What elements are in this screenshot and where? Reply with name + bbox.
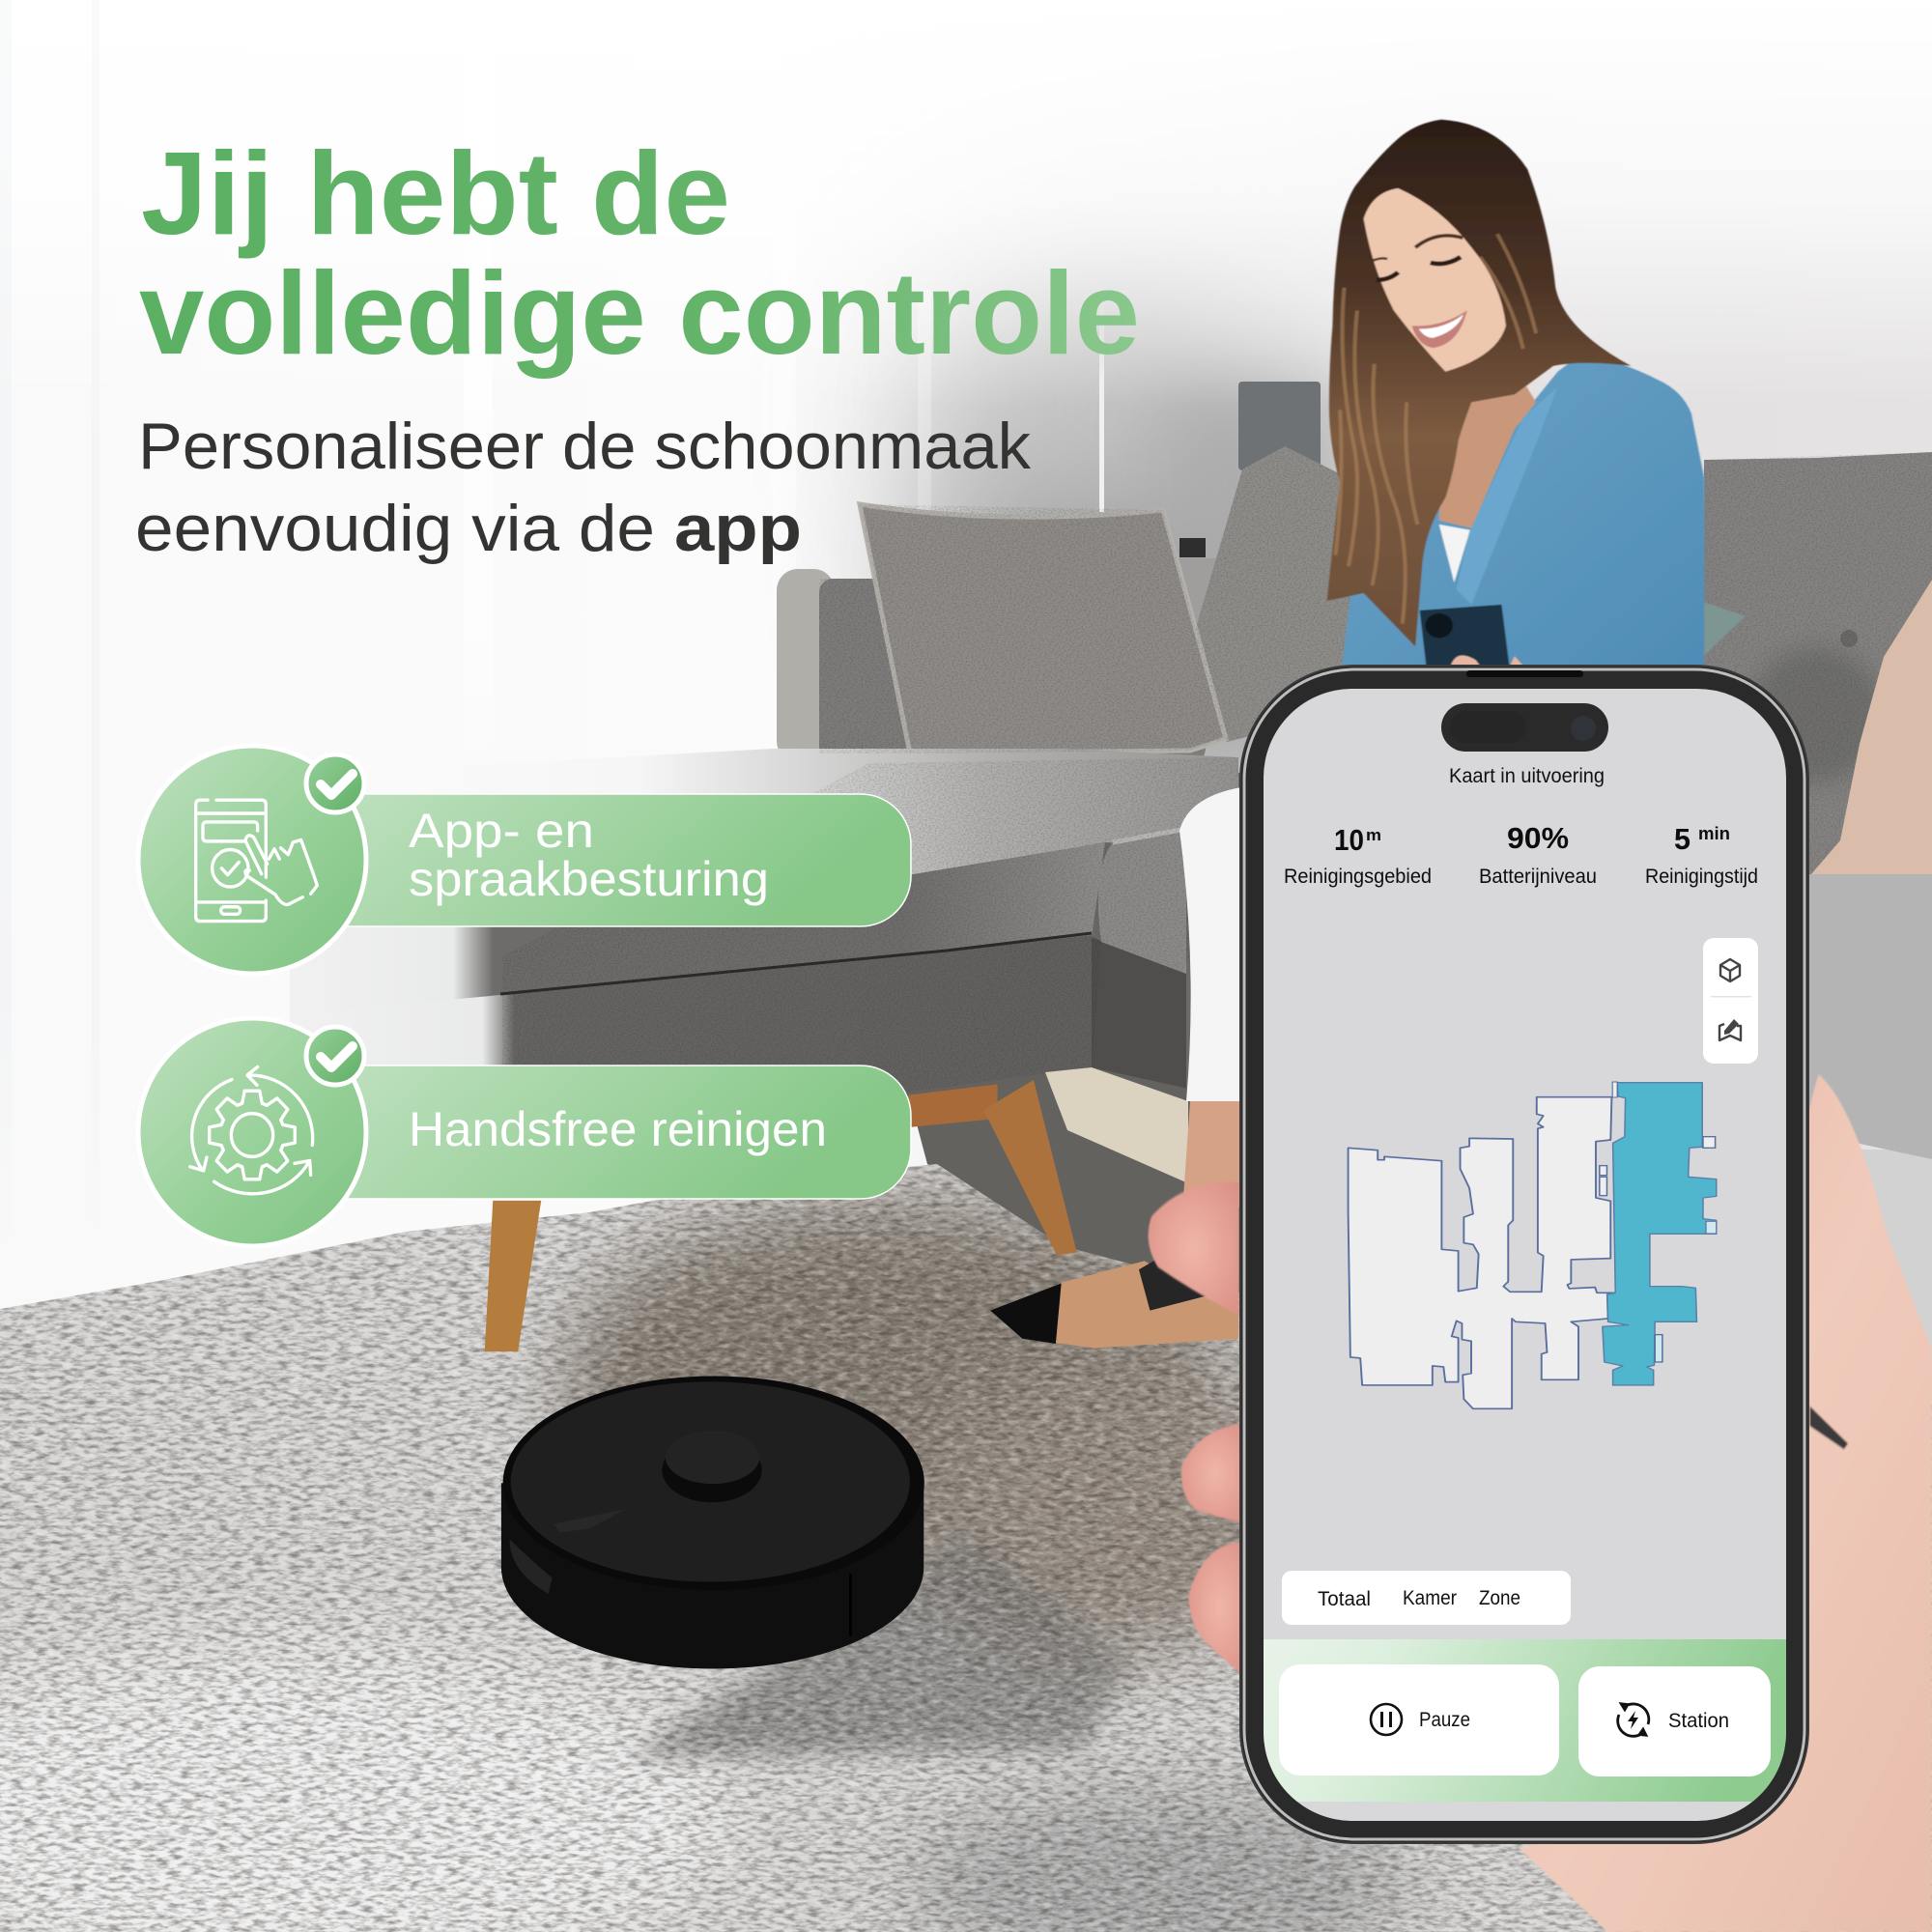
pill label: App- en (409, 804, 594, 858)
mode tabs: Totaal (1318, 1588, 1371, 1610)
icon: 3D cube (1720, 959, 1740, 981)
robot vacuum (501, 1377, 924, 1668)
screen (1264, 689, 1786, 1821)
sofa (290, 446, 1932, 1179)
stat: cleaning time: Reinigingstijd (1645, 866, 1758, 888)
subheading (135, 410, 1032, 565)
feature: hands-free cleaning (138, 1018, 911, 1246)
icon: map edit (1719, 1019, 1741, 1040)
subheading: Personaliseer de schoonmaak (138, 410, 1032, 483)
cleaned rooms (1349, 1097, 1615, 1408)
floor plan map (1349, 1082, 1717, 1408)
stat: battery level: 90% (1507, 821, 1569, 855)
woman seated legs (1179, 787, 1241, 1208)
check badge (306, 1027, 364, 1085)
station button (1578, 1666, 1771, 1776)
stat: battery level (1479, 821, 1597, 888)
pause button: Pauze (1419, 1709, 1470, 1731)
stat: cleaning area: Reinigingsgebied (1284, 866, 1432, 888)
beige blanket cushion (1811, 580, 1932, 874)
right sofa seat (1797, 874, 1932, 1159)
sofa fabric texture (502, 446, 1932, 1094)
stat: cleaning area: 10 (1334, 823, 1364, 857)
pill label (290, 794, 911, 926)
pause button (1279, 1664, 1559, 1776)
subheading: eenvoudig via de (135, 492, 655, 565)
pill label: Handsfree reinigen (409, 1102, 827, 1156)
shoe (990, 1257, 1238, 1349)
mode tabs: Kamer (1403, 1587, 1457, 1609)
map toolbar (1703, 938, 1758, 1064)
stat: cleaning area (1284, 823, 1432, 888)
heading: Jij hebt de (141, 128, 730, 259)
heading: volledige controle (139, 247, 1140, 379)
screen title: Kaart in uitvoering (1449, 765, 1605, 787)
rug (0, 1159, 1932, 1932)
check badge (306, 754, 364, 812)
rug right of phone (1806, 1150, 1932, 1401)
station button: Station (1668, 1710, 1729, 1732)
stat: cleaning area: m (1366, 826, 1381, 844)
active room (1603, 1083, 1717, 1385)
floor under the sofa (908, 1067, 1246, 1294)
stat: cleaning time: min (1698, 824, 1730, 843)
mode tabs: Zone (1479, 1587, 1520, 1609)
dynamic island (1441, 703, 1608, 752)
phone mockup (1240, 666, 1808, 1843)
icon disc: phone and hand (138, 746, 366, 974)
subheading: app (674, 492, 802, 565)
sofa legs (485, 1080, 1077, 1351)
hand holding phone (1149, 1074, 1932, 1932)
woman (1327, 120, 1746, 666)
pill label: spraakbesturing (409, 852, 769, 906)
feature: app and voice control (138, 746, 911, 974)
phone body (1240, 666, 1808, 1843)
pill label (290, 1065, 911, 1199)
bottom action band (1264, 1639, 1786, 1802)
mode tabs (1282, 1571, 1571, 1625)
icon disc: gear (138, 1018, 366, 1246)
heading (139, 128, 1140, 379)
stat: cleaning time: 5 (1674, 822, 1690, 856)
stat: battery level: Batterijniveau (1479, 866, 1597, 888)
stat: cleaning time (1645, 822, 1758, 888)
basket (1045, 1067, 1188, 1183)
